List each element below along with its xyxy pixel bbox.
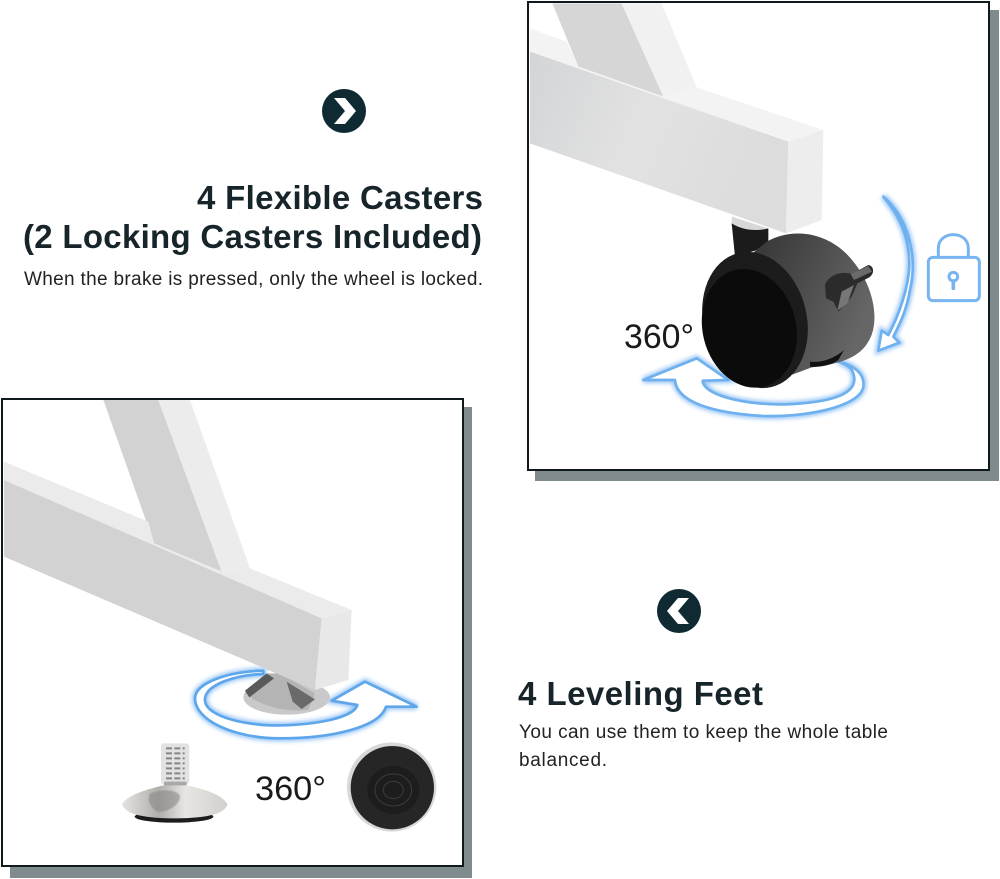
icon: left chevron badge: [657, 589, 701, 633]
heading: flexible casters: [23, 179, 483, 255]
panel: leveling feet photo: [2, 399, 472, 878]
arrow: 360 degree swivel: [643, 358, 863, 416]
arrow: foot rotation: [195, 671, 417, 738]
leveling foot: threaded bolt side view: [122, 743, 227, 823]
text: casters description: When the brake is pressed, only the wheel is locked.: [24, 269, 483, 290]
heading: leveling feet: 4 Leveling Feet: [518, 675, 763, 712]
caster wheel: [688, 217, 874, 399]
leveling foot under leg: [243, 673, 330, 715]
panel: casters photo: [528, 2, 999, 481]
icon: right chevron badge: [322, 89, 366, 133]
label: foot 360 degrees: 360°: [255, 770, 326, 808]
text: leveling feet description: balanced.: [519, 750, 607, 771]
heading: flexible casters: (2 Locking Casters Included): [23, 218, 482, 255]
arrow: rotating brake: [878, 197, 913, 351]
table leg: foot side: [4, 400, 352, 690]
text: leveling feet description: You can use them to keep the whole table: [519, 722, 888, 743]
leveling foot: rubber pad: [347, 742, 436, 832]
table leg: caster side: [530, 3, 823, 233]
icon: padlock: [928, 235, 979, 301]
text: leveling feet description: [519, 722, 888, 771]
label: caster 360 degrees: 360°: [624, 318, 694, 356]
heading: flexible casters: 4 Flexible Casters: [197, 179, 483, 216]
